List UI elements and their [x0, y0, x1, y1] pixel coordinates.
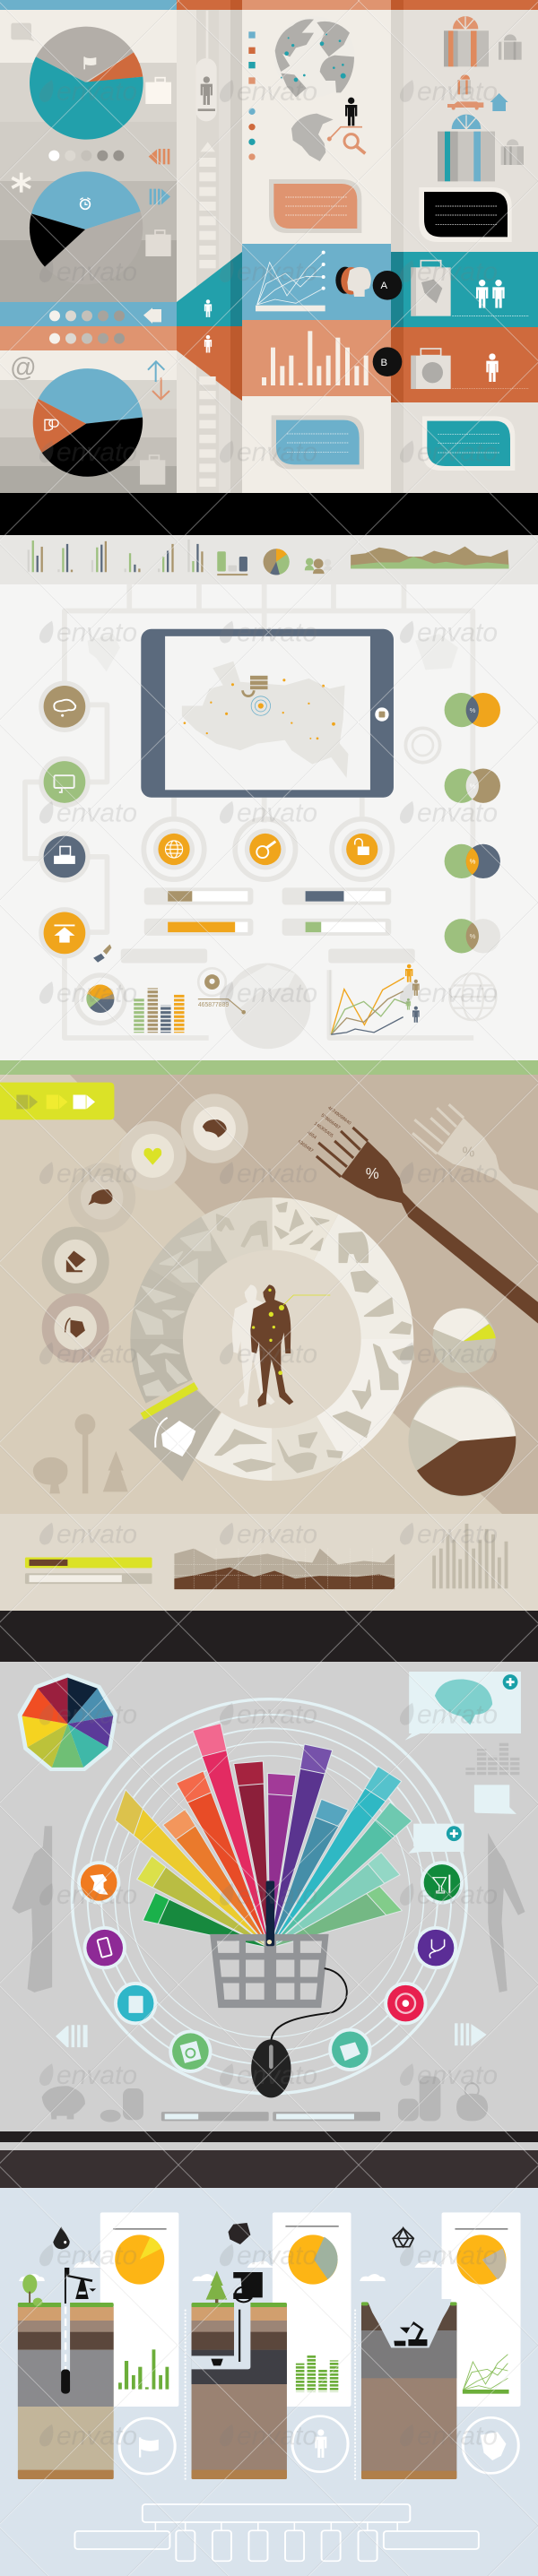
- concentric ring: [405, 728, 440, 763]
- area chart: [351, 547, 509, 568]
- circle icon: brain: [181, 1094, 248, 1163]
- tablet: [141, 629, 394, 798]
- mini bar charts: [28, 540, 204, 572]
- icon: asterisk: [12, 173, 30, 193]
- icon: briefcase 3: [140, 455, 165, 485]
- pie in ring: [76, 975, 125, 1024]
- soil column oil: [18, 2303, 114, 2479]
- faint globes: [88, 634, 458, 671]
- colour wheel: [18, 1673, 117, 1771]
- icon: house: [490, 93, 508, 111]
- icon: stacked server: [243, 676, 268, 696]
- icon: coins left: [100, 2088, 143, 2122]
- fork value labels: 46749098640: [326, 1105, 352, 1127]
- icon: oil drop: [53, 2226, 70, 2249]
- equalizer: [465, 1741, 521, 1776]
- pie chart 2: [30, 171, 143, 284]
- pie chart 1: [30, 27, 143, 140]
- section 4: online shopping fan: [0, 1611, 538, 2188]
- mini pie: [264, 549, 290, 575]
- progress bars: [25, 1558, 152, 1584]
- icon: small grey gift: [499, 34, 522, 60]
- woman silhouette: [488, 1833, 525, 1993]
- icon: plug: [93, 944, 111, 963]
- icon: shopping bag orange: [411, 349, 451, 389]
- dotted dividers: [186, 2310, 355, 2480]
- connector lines: [25, 584, 473, 1038]
- equalizer coal: [295, 2355, 339, 2392]
- callout: orange bubble: [269, 179, 361, 233]
- grid globe outline: [449, 973, 496, 1020]
- body markers: [252, 1289, 330, 1375]
- line chart on blue: [256, 251, 325, 311]
- icon: book: [114, 1982, 157, 2025]
- background bands: [0, 0, 538, 538]
- globe with number callout: [198, 964, 310, 1049]
- shopping basket: [210, 1934, 329, 2008]
- at sign: @: [10, 352, 37, 382]
- icon: person on teal: [204, 299, 212, 317]
- outlined circle: flag: [119, 2418, 175, 2474]
- icon: diamond: [393, 2228, 413, 2247]
- large globe with data points: [274, 16, 355, 97]
- section 5: mining infographic: [0, 2188, 538, 2576]
- flow node: printer: [39, 831, 91, 883]
- white panels: [100, 2212, 521, 2407]
- pie large: [408, 1386, 516, 1497]
- bar chart: [432, 1524, 508, 1588]
- venn 1: [445, 693, 500, 727]
- venn 2: [445, 769, 500, 803]
- callout: blue bubble: [272, 415, 364, 469]
- icon: washing machine: [169, 2030, 213, 2073]
- icon: piggy bank: [42, 2086, 85, 2119]
- basket handle: [266, 1881, 274, 1946]
- soil column open pit: [361, 2299, 456, 2479]
- fork value labels: 4654: [306, 1130, 317, 1141]
- tablet home button: [375, 707, 389, 722]
- org chart: [74, 2504, 479, 2561]
- small globe: [291, 114, 334, 161]
- callout: black bubble: [419, 187, 512, 242]
- fork: [297, 1105, 538, 1324]
- icon: purse: [456, 2083, 488, 2121]
- icon: small gift on car: [447, 74, 483, 110]
- venn 2: %: [470, 782, 476, 790]
- human silhouette shadow: [232, 1284, 275, 1407]
- icon: speech bubble: [11, 23, 34, 41]
- animal plate wheel: [128, 1197, 414, 1482]
- icon: stethoscope: [414, 1926, 457, 1969]
- icon: person on orange: [204, 335, 212, 353]
- icon: phone: [83, 1926, 126, 1969]
- progress bars: [144, 887, 391, 936]
- pie coal: [288, 2235, 338, 2285]
- line chart diamond: [463, 2355, 509, 2394]
- line chart with people: [330, 964, 420, 1035]
- icon: tree and bush: [22, 2275, 42, 2306]
- icon: oil pump: [65, 2268, 96, 2304]
- flow node: cloud: [39, 681, 91, 732]
- icon: people group: [305, 558, 332, 574]
- pale animal silhouettes: [136, 1231, 211, 1396]
- icon: orange gift: [444, 16, 489, 66]
- section 3: food chain infographic: [0, 1060, 538, 1612]
- icon: mine head frame: [233, 2272, 263, 2302]
- callout: brain: [405, 1672, 521, 1741]
- animal silhouettes: [215, 1203, 414, 1473]
- icon: excavator and truck: [394, 2321, 427, 2346]
- lime strip: [141, 1382, 198, 1420]
- icon: briefcase 2: [145, 230, 171, 256]
- area chart: [174, 1549, 395, 1589]
- icon: blue arrow tag: [150, 189, 170, 204]
- icon: up and down arrows: [148, 361, 169, 399]
- map of Russia: [182, 661, 348, 778]
- icon: large blue gift: [438, 115, 495, 181]
- inner plate: [183, 1250, 361, 1428]
- pie small: [432, 1308, 496, 1373]
- fork value labels: [297, 1105, 352, 1154]
- icon: pine tree: [206, 2270, 227, 2303]
- icon: person: [486, 353, 499, 382]
- equalizer chart: [132, 987, 187, 1033]
- legend squares and dots: [248, 31, 256, 160]
- venn 4: %: [470, 932, 476, 940]
- icon: tag with person: [195, 11, 217, 121]
- badge B: B: [381, 358, 387, 368]
- arrow tag left: [56, 2025, 88, 2047]
- human figure: [250, 1284, 293, 1407]
- venn 1: %: [470, 706, 476, 714]
- fork value labels: 6365487: [297, 1139, 314, 1154]
- icon: trees: [33, 1413, 128, 1493]
- icon: overlapping heads: [335, 267, 371, 297]
- circle icon: speech blob: [68, 1163, 135, 1232]
- badge A: A: [381, 281, 388, 291]
- fork value labels: 146305405: [313, 1121, 334, 1139]
- callout: teal bubble: [422, 416, 515, 471]
- label placeholders: [121, 948, 415, 964]
- icon: person silhouette: [345, 98, 357, 125]
- background: [0, 1060, 538, 1612]
- man silhouette: [12, 1826, 52, 1993]
- map target rings: [251, 696, 271, 715]
- bar chart oil: [118, 2349, 169, 2390]
- venn 3: %: [470, 858, 476, 866]
- globe segment: [128, 1389, 221, 1482]
- ghost fork: %: [463, 1145, 474, 1161]
- pie oil: [115, 2235, 164, 2285]
- bar chart with base: [217, 551, 247, 575]
- rays fan: [115, 1724, 412, 1948]
- bar chart on orange: [262, 331, 369, 385]
- road with arrow: [199, 142, 216, 268]
- outlined circle: person: [292, 2416, 348, 2472]
- icon: coal lump: [228, 2223, 250, 2244]
- dashed rule 2: [452, 388, 529, 390]
- icon: shopping bag teal: [411, 261, 451, 316]
- circle icon: notes: [42, 1227, 109, 1296]
- badge A: [373, 271, 402, 300]
- icon: orange arrow tag: [149, 149, 169, 164]
- icon: small grey gift 2: [501, 139, 524, 165]
- venn 3: [445, 844, 500, 878]
- icon: connector and magnifier: [327, 127, 365, 153]
- flow node: monitor: [39, 756, 91, 808]
- node: magnifier: [235, 819, 296, 879]
- background bands: [0, 1611, 538, 2188]
- pie diamond: [456, 2235, 506, 2285]
- dot row: [48, 151, 124, 161]
- mouse and cable: [251, 1968, 347, 2097]
- outlined circle: globe: [463, 2417, 518, 2473]
- icon: sofa: [328, 2028, 371, 2071]
- flow node: upload: [39, 907, 91, 959]
- icon: briefcase: [145, 78, 171, 104]
- node: unlock: [332, 819, 392, 879]
- lime tag with arrows: [0, 1083, 114, 1119]
- arrow tag right: [455, 2023, 487, 2046]
- map data points: [184, 679, 335, 739]
- globe with number callout: 465877889: [198, 1002, 229, 1008]
- fork value labels: 579666487: [320, 1113, 341, 1131]
- section background: [0, 535, 538, 1060]
- badge B: [373, 347, 402, 376]
- section 2: tablet data dashboard: [0, 535, 538, 1060]
- circle icon: world: [42, 1293, 109, 1362]
- dot row orange: [49, 333, 125, 344]
- icon: disc: [384, 1982, 427, 2025]
- road dashes: [199, 376, 216, 487]
- blank speech bubble: [474, 1785, 516, 1814]
- circle icon: heart: [119, 1121, 187, 1190]
- node: globe: [143, 819, 204, 879]
- progress bars: [161, 2112, 380, 2121]
- icon: two people: [476, 280, 505, 308]
- soil column coal: [192, 2303, 287, 2479]
- callout: small plus: [408, 1824, 464, 1854]
- dot row blue: [49, 310, 125, 321]
- clouds: [19, 2260, 443, 2281]
- pie chart 3: [33, 368, 143, 477]
- concentric rings: [72, 1699, 466, 2094]
- icon: mine cart: [211, 2359, 223, 2365]
- icon: clothes: [77, 1861, 120, 1905]
- icon: left arrow: [143, 307, 161, 324]
- chart rules: [113, 2226, 508, 2230]
- fork: %: [366, 1165, 379, 1182]
- background: [0, 2188, 538, 2576]
- icon: coins right: [398, 2077, 440, 2121]
- section 1: retail infographic: [0, 0, 538, 538]
- icon: dining: [421, 1861, 464, 1905]
- venn 4: [445, 919, 500, 953]
- dashed rule: [452, 315, 529, 316]
- ghost fork: [412, 1104, 538, 1214]
